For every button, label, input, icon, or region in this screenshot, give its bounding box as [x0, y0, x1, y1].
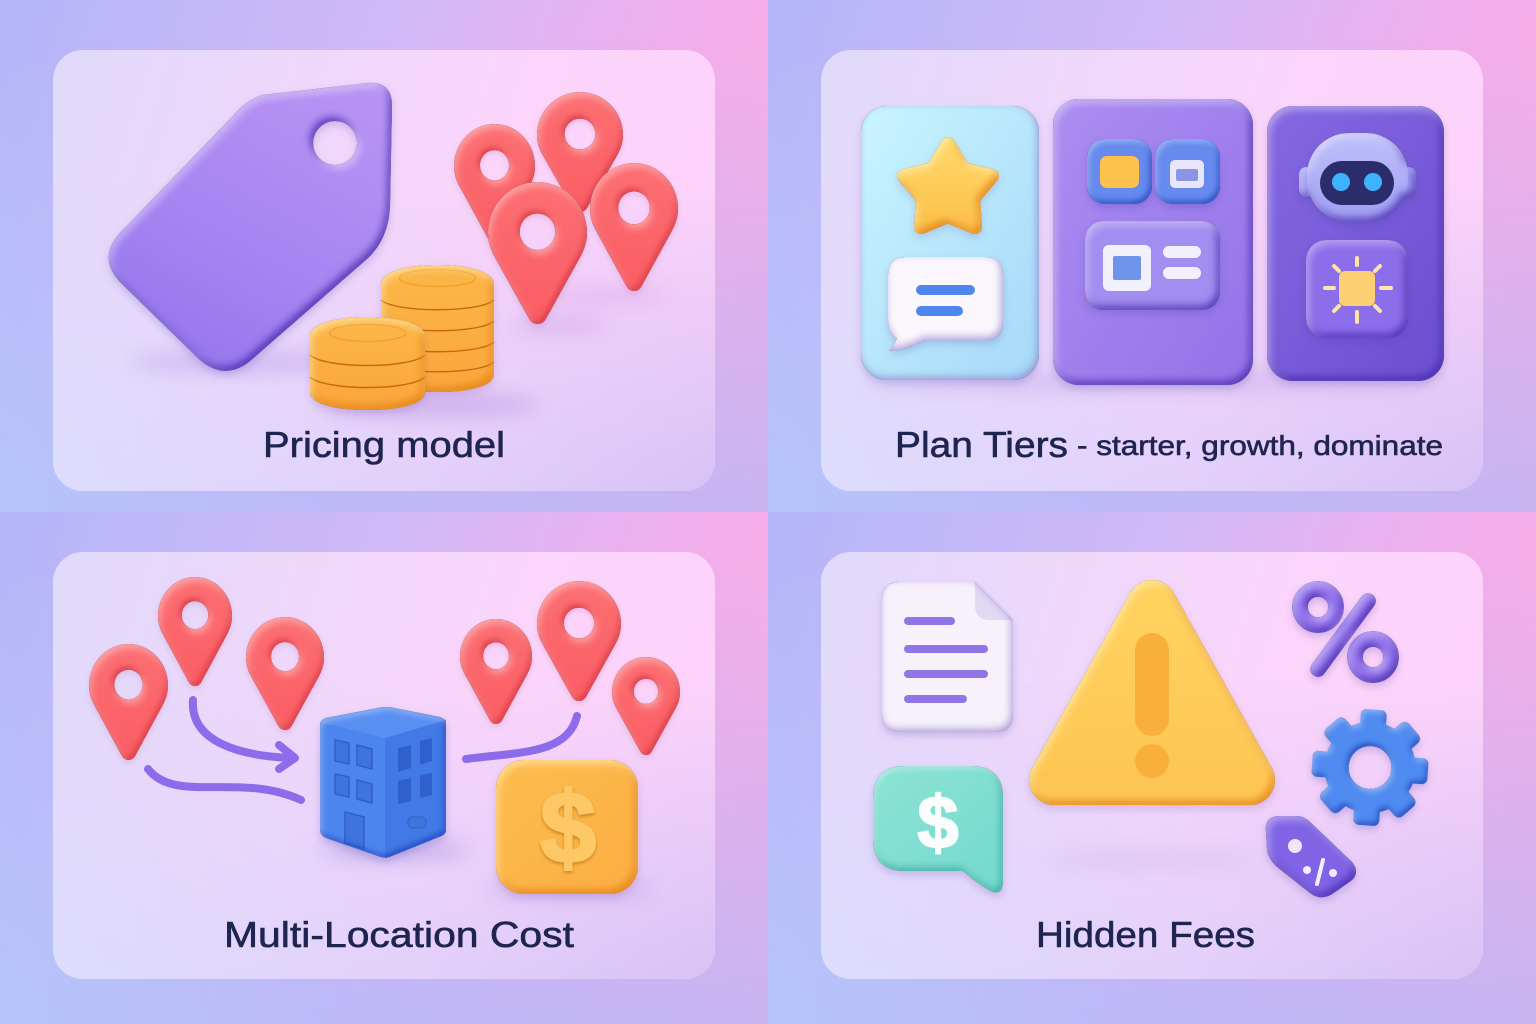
icon: location pin 3 — [590, 163, 678, 291]
icon: gear — [1308, 706, 1432, 829]
panel: hidden fees — [821, 552, 1483, 979]
icon: widget one — [1087, 139, 1152, 204]
icon: pin right 3 — [612, 657, 680, 755]
icon: pin right 1 — [460, 619, 532, 724]
icon: stack of coins, back — [381, 265, 494, 392]
icon: building — [320, 707, 446, 858]
icon: wide widget — [1085, 221, 1220, 310]
icon: dollar speech bubble — [873, 766, 1003, 892]
icon: warning triangle — [1054, 605, 1250, 780]
heading: hidden fees: Hidden Fees — [1036, 914, 1255, 955]
background: top left — [0, 0, 768, 512]
background: bottom left — [0, 512, 768, 1024]
icon: star — [904, 144, 992, 227]
icon: price tag — [109, 83, 392, 371]
icon: location pin 2 — [537, 92, 623, 212]
icon: dollar speech bubble: $ — [917, 781, 959, 864]
arrow: lower left to building — [148, 769, 301, 800]
card: starter tier — [861, 106, 1039, 380]
background: bottom right — [768, 512, 1536, 1024]
background: top right — [768, 0, 1536, 512]
card: growth tier — [1053, 99, 1253, 385]
panel: pricing model — [53, 50, 715, 491]
arrow: building to right pins — [466, 716, 577, 759]
arrow: upper left to building — [193, 700, 295, 769]
icon: robot — [1299, 133, 1416, 222]
icon: document — [882, 582, 1013, 732]
card: dominate tier — [1267, 106, 1444, 381]
icon: dollar tile — [496, 760, 638, 894]
icon: chat bubble — [888, 257, 1003, 351]
label: dollar sign on tile: $ — [540, 772, 596, 884]
icon: percent — [1300, 589, 1391, 675]
icon: pin left 3 — [246, 617, 324, 730]
heading: multi-location cost: Multi-Location Cost — [224, 914, 574, 955]
icon: location pin 1 — [454, 124, 535, 242]
heading: plan tiers — [895, 424, 1443, 465]
icon: pin right 2 — [537, 581, 621, 701]
icon: pin left 2 — [158, 577, 232, 686]
panel: multi-location cost — [53, 552, 715, 979]
heading: pricing model: Pricing model — [263, 424, 505, 465]
icon: chip with sun — [1306, 240, 1408, 338]
heading: plan tiers: Plan Tiers — [895, 424, 1068, 465]
heading: plan tiers: - starter, growth, dominate — [1077, 430, 1443, 461]
icon: widget two — [1155, 139, 1220, 204]
icon: location pin 4 — [488, 182, 587, 324]
icon: stack of coins, front — [310, 317, 425, 410]
icon: pin left 1 — [89, 644, 168, 760]
panel: plan tiers — [821, 50, 1483, 491]
icon: small discount tag — [1266, 816, 1356, 897]
